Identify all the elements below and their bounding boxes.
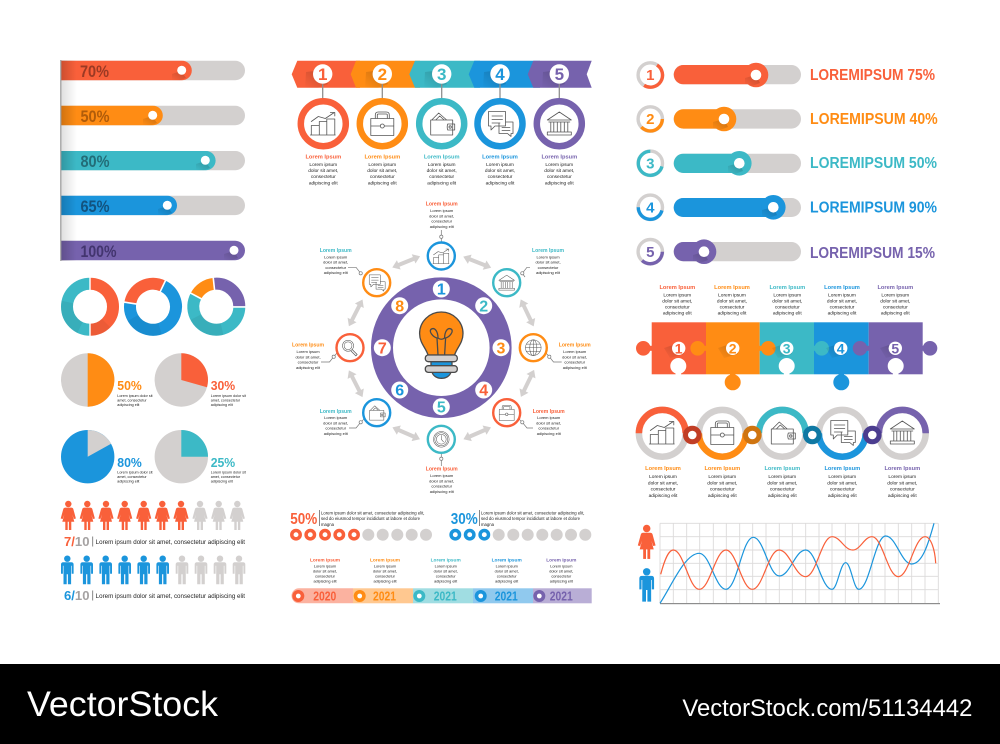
donut 2 <box>124 280 176 330</box>
step 4: dolor sit amet, <box>485 168 515 174</box>
bar 50% <box>61 106 245 126</box>
timeline text blocks: Lorem ipsum <box>496 565 518 569</box>
ring text: consectetur <box>830 487 855 493</box>
puzzle text: dolor sit amet, <box>880 298 910 304</box>
node 2: consectetur <box>538 265 559 270</box>
node 3: dolor sit amet, <box>562 354 587 359</box>
ring text <box>645 466 920 499</box>
puzzle text: Lorem Ipsum <box>659 285 695 291</box>
node 1: consectetur <box>431 219 453 224</box>
node 5 <box>426 426 458 494</box>
footer band <box>0 664 1000 744</box>
step 5: consectetur <box>547 174 572 180</box>
puzzle text: Lorem ipsum <box>718 292 746 298</box>
blue series <box>660 523 934 603</box>
step 5: adipiscing elit <box>545 180 574 186</box>
rings <box>639 410 926 457</box>
panel: 30% dot rating <box>451 510 591 541</box>
node 5: Lorem Ipsum <box>426 467 458 473</box>
ring text: Lorem Ipsum <box>704 466 740 472</box>
step 5: Lorem Ipsum <box>541 155 577 161</box>
panel: 50% dot rating <box>290 510 432 541</box>
node 2: dolor sit amet, <box>535 260 561 265</box>
step 2: adipiscing elit <box>368 180 397 186</box>
node 4 <box>493 399 565 436</box>
node 7: Lorem Ipsum <box>292 343 324 349</box>
step 4: Lorem ipsum <box>486 162 514 168</box>
pie 30%: amet, consectetur <box>211 399 241 403</box>
ring text: adipiscing elit <box>828 493 857 499</box>
puzzle text: adipiscing elit <box>881 311 910 317</box>
node 4: consectetur <box>538 426 560 431</box>
panel: linked rings <box>639 410 926 499</box>
ring text: Lorem Ipsum <box>884 466 920 472</box>
panel: radial diagram with lightbulb <box>292 202 591 494</box>
node 8: Lorem Ipsum <box>320 248 352 254</box>
timeline text blocks: consectetur <box>436 575 456 579</box>
pie 50% <box>61 353 153 407</box>
step 5: Lorem ipsum <box>545 162 573 168</box>
timeline text blocks: adipiscing elit <box>495 580 519 584</box>
node 5: Lorem ipsum <box>430 473 454 478</box>
ring numbers: 3 <box>497 340 506 357</box>
puzzle pieces <box>636 322 937 390</box>
node 7: adipiscing elit <box>296 365 321 370</box>
bar 50%: 50% <box>80 108 110 126</box>
step 2: consectetur <box>370 174 395 180</box>
ring text: adipiscing elit <box>649 493 678 499</box>
timeline text blocks: dolor sit amet, <box>313 570 337 574</box>
step 2: dolor sit amet, <box>367 168 397 174</box>
step 5 <box>537 64 582 186</box>
node 8: consectetur <box>325 265 347 270</box>
node 4: adipiscing elit <box>537 431 562 436</box>
puzzle text: Lorem ipsum <box>881 292 909 298</box>
step 3: 3 <box>437 65 446 84</box>
slider 2 <box>638 107 938 131</box>
step 4: adipiscing elit <box>486 180 515 186</box>
ring icons <box>649 420 914 446</box>
bar 70% <box>61 61 245 81</box>
ring text: consectetur <box>651 487 676 493</box>
node 1 <box>426 202 458 270</box>
node 4: Lorem Ipsum <box>533 409 565 415</box>
slider 5 <box>638 239 935 264</box>
description: sed do eiusmod tempor incididunt ut labore et dolore <box>321 516 421 521</box>
node 5: adipiscing elit <box>430 489 455 494</box>
pie 30%: Lorem ipsum dolor sit <box>211 394 246 398</box>
node 2: adipiscing elit <box>536 270 561 275</box>
heading 30%: 30% <box>451 511 478 528</box>
node 6: Lorem ipsum <box>324 415 348 420</box>
link circles <box>686 428 879 442</box>
slider 1: 1 <box>646 67 654 84</box>
pie 30% <box>155 353 246 407</box>
description: Lorem ipsum dolor sit amet, consectetur adipiscing elit, <box>321 510 424 515</box>
pie 50%: adipiscing elit <box>117 403 139 407</box>
timeline text blocks: consectetur <box>315 575 336 579</box>
ring text: dolor sit amet, <box>648 480 678 486</box>
timeline text blocks: Lorem Ipsum <box>370 557 400 563</box>
donut 3 <box>190 277 246 330</box>
puzzle text: dolor sit amet, <box>717 298 747 304</box>
bar 65% <box>61 196 245 216</box>
step 5: dolor sit amet, <box>544 168 574 174</box>
step 1: 1 <box>318 65 327 84</box>
puzzle numbers: 3 <box>783 340 791 356</box>
pie 50%: amet, consectetur <box>117 399 147 403</box>
puzzle text: Lorem Ipsum <box>769 285 805 291</box>
pie 25% <box>155 430 246 484</box>
slider 1: LOREMIPSUM 75% <box>810 67 935 84</box>
men row 6 of 10 <box>61 556 245 584</box>
men caption: Lorem ipsum dolor sit amet, consectetur adipiscing elit <box>96 594 245 600</box>
step 2: Lorem Ipsum <box>364 155 400 161</box>
timeline text blocks: adipiscing elit <box>434 580 458 584</box>
pie 80%: Lorem ipsum dolor sit <box>117 470 153 474</box>
dots <box>292 529 432 541</box>
step 4 <box>478 64 522 186</box>
ring text: adipiscing elit <box>708 493 737 499</box>
timeline bar: 2021 <box>434 589 457 604</box>
ring text: Lorem ipsum <box>888 474 916 480</box>
pie 50%: Lorem ipsum dolor sit <box>117 394 153 398</box>
ribbon arrows <box>292 61 592 88</box>
node 4: Lorem ipsum <box>537 415 561 420</box>
puzzle text: consectetur <box>883 304 908 310</box>
puzzle text: consectetur <box>720 304 745 310</box>
pie 80%: 80% <box>117 455 142 470</box>
step 3: Lorem Ipsum <box>424 155 460 161</box>
red series <box>661 537 936 589</box>
timeline text blocks: consectetur <box>375 575 396 579</box>
puzzle numbers: 4 <box>837 340 845 356</box>
ring text: adipiscing elit <box>888 493 917 499</box>
ring text: adipiscing elit <box>768 493 797 499</box>
puzzle text: consectetur <box>665 304 690 310</box>
step 2 <box>360 64 405 186</box>
women caption: Lorem ipsum dolor sit amet, consectetur adipiscing elit <box>96 540 245 546</box>
brand name: VectorStock <box>27 685 219 724</box>
bar 100% <box>61 241 245 261</box>
puzzle numbers <box>672 340 902 356</box>
slider 2: 2 <box>646 111 654 128</box>
chart axis <box>660 603 940 604</box>
step 3 <box>419 64 464 186</box>
panel: people pictograms <box>61 501 245 603</box>
step 3: Lorem ipsum <box>428 162 456 168</box>
node 3 <box>520 334 591 370</box>
bar 80% <box>61 151 245 171</box>
timeline text blocks: Lorem Ipsum <box>546 557 576 563</box>
node 2: Lorem Ipsum <box>532 248 564 254</box>
puzzle text: adipiscing elit <box>718 311 747 317</box>
slider 4 <box>638 195 937 220</box>
description: magna <box>321 522 335 527</box>
node 3: consectetur <box>564 360 586 365</box>
timeline text blocks: Lorem ipsum <box>314 565 336 569</box>
panel: progress sliders <box>638 63 938 264</box>
ring text: consectetur <box>710 487 735 493</box>
node 6: dolor sit amet, <box>323 420 348 425</box>
node 5: consectetur <box>431 484 453 489</box>
puzzle numbers: 2 <box>729 340 737 356</box>
panel: numbered ribbon steps <box>292 61 592 186</box>
ring text: dolor sit amet, <box>707 480 737 486</box>
bar 65%: 65% <box>80 198 110 216</box>
timeline text blocks: Lorem Ipsum <box>431 557 461 563</box>
step 5: 5 <box>555 65 564 84</box>
node 3: adipiscing elit <box>563 365 588 370</box>
timeline text blocks: dolor sit amet, <box>495 570 519 574</box>
ring text: Lorem ipsum <box>768 474 796 480</box>
connector leaders <box>321 230 562 466</box>
ring numbers: 2 <box>479 298 488 315</box>
node 1: adipiscing elit <box>430 224 455 229</box>
slider 4: LOREMIPSUM 90% <box>810 199 937 216</box>
node 6: adipiscing elit <box>324 431 349 436</box>
ring numbers: 4 <box>479 383 488 400</box>
step 2: Lorem ipsum <box>368 162 396 168</box>
puzzle text: Lorem Ipsum <box>714 285 750 291</box>
panel: pie charts <box>61 353 246 484</box>
node 7: dolor sit amet, <box>295 354 321 359</box>
icon: lightbulb <box>420 312 463 378</box>
node 3: Lorem Ipsum <box>559 343 591 349</box>
timeline text blocks: adipiscing elit <box>550 580 574 584</box>
ring text: dolor sit amet, <box>827 480 857 486</box>
puzzle text: dolor sit amet, <box>772 298 802 304</box>
node 7: consectetur <box>298 360 319 365</box>
slider 3 <box>638 151 937 176</box>
description: sed do eiusmod tempor incididunt ut labore et dolore <box>481 516 581 521</box>
timeline bar: 2020 <box>313 589 336 604</box>
puzzle text: Lorem ipsum <box>663 292 691 298</box>
image id: VectorStock.com/51134442 <box>682 695 972 722</box>
pie 80% <box>61 430 153 484</box>
ring numbers: 7 <box>378 340 387 357</box>
node 2: Lorem ipsum <box>536 254 560 259</box>
timeline bar: 2021 <box>495 589 518 604</box>
timeline bar: 2021 <box>373 589 396 604</box>
ring text: consectetur <box>890 487 915 493</box>
dots <box>451 529 591 541</box>
pie 80%: adipiscing elit <box>117 480 139 484</box>
timeline text blocks: dolor sit amet, <box>373 570 397 574</box>
pie 25%: adipiscing elit <box>211 480 233 484</box>
puzzle text: adipiscing elit <box>828 311 857 317</box>
purple ring <box>382 288 501 407</box>
ring text: Lorem ipsum <box>649 474 677 480</box>
ring text: Lorem ipsum <box>828 474 856 480</box>
ring text: consectetur <box>770 487 795 493</box>
description: magna <box>481 522 495 527</box>
step 1: Lorem ipsum <box>309 162 337 168</box>
bar 80%: 80% <box>80 153 110 171</box>
step 4: consectetur <box>488 174 513 180</box>
ring text: Lorem Ipsum <box>824 466 860 472</box>
puzzle numbers: 1 <box>675 340 683 356</box>
step 4: Lorem Ipsum <box>482 155 518 161</box>
puzzle text: Lorem Ipsum <box>824 285 860 291</box>
step 1: Lorem Ipsum <box>305 155 341 161</box>
ring text: dolor sit amet, <box>767 480 797 486</box>
timeline text blocks: Lorem ipsum <box>435 565 457 569</box>
ring text: Lorem Ipsum <box>764 466 800 472</box>
puzzle numbers: 5 <box>891 340 899 356</box>
puzzle text <box>659 285 913 317</box>
pie 25%: amet, consectetur <box>211 475 241 479</box>
bar 70%: 70% <box>80 63 109 81</box>
women caption: 7/10 <box>64 534 90 549</box>
node 3: Lorem ipsum <box>563 349 587 354</box>
slider 5: LOREMIPSUM 15% <box>810 245 935 262</box>
puzzle text: Lorem Ipsum <box>877 285 913 291</box>
ring numbers: 8 <box>395 298 404 315</box>
pie 30%: adipiscing elit <box>211 403 233 407</box>
timeline text blocks: Lorem ipsum <box>374 565 396 569</box>
step 1: consectetur <box>311 174 336 180</box>
slider 4: 4 <box>646 200 655 216</box>
node 8: adipiscing elit <box>324 270 349 275</box>
puzzle text: adipiscing elit <box>663 311 692 317</box>
slider 3: 3 <box>646 156 654 172</box>
timeline text blocks: Lorem ipsum <box>550 565 572 569</box>
node 4: dolor sit amet, <box>536 420 561 425</box>
slider 1 <box>638 63 935 87</box>
timeline text blocks: adipiscing elit <box>373 580 397 584</box>
timeline bar: 2021 <box>550 589 573 604</box>
timeline text blocks: consectetur <box>551 575 572 579</box>
description: Lorem ipsum dolor sit amet, consectetur adipiscing elit, <box>481 510 584 515</box>
timeline text blocks <box>310 557 576 584</box>
pie 25%: 25% <box>211 455 236 470</box>
slider 3: LOREMIPSUM 50% <box>810 155 937 172</box>
panel: year timeline <box>292 557 592 604</box>
step 2: 2 <box>378 65 387 84</box>
step 4: 4 <box>495 65 505 84</box>
node 7: Lorem ipsum <box>296 349 320 354</box>
step 1: adipiscing elit <box>309 180 338 186</box>
puzzle text: Lorem ipsum <box>828 292 856 298</box>
node 6: Lorem Ipsum <box>320 409 352 415</box>
pie 30%: 30% <box>211 378 236 393</box>
timeline text blocks: dolor sit amet, <box>434 570 458 574</box>
ring numbers: 5 <box>437 399 446 416</box>
puzzle text: Lorem ipsum <box>773 292 801 298</box>
node 5: dolor sit amet, <box>429 478 454 483</box>
puzzle text: adipiscing elit <box>773 311 802 317</box>
ring text: Lorem Ipsum <box>645 466 681 472</box>
panel: horizontal percentage bars <box>60 60 245 261</box>
donut 1 <box>67 276 113 337</box>
timeline text blocks: Lorem Ipsum <box>310 557 340 563</box>
node 2 <box>493 248 564 296</box>
slider 5: 5 <box>646 244 654 261</box>
puzzle text: consectetur <box>775 304 800 310</box>
connecting arrows <box>344 252 539 444</box>
women caption <box>64 534 245 549</box>
timeline text blocks: Lorem Ipsum <box>492 557 522 563</box>
timeline text blocks: adipiscing elit <box>313 580 337 584</box>
ring numbers <box>374 280 510 416</box>
panel: donut charts <box>67 276 246 337</box>
icon: woman <box>638 525 656 559</box>
puzzle text: consectetur <box>830 304 855 310</box>
timeline bar <box>292 588 592 604</box>
bar 100%: 100% <box>80 243 117 261</box>
node 8: dolor sit amet, <box>323 260 348 265</box>
men caption <box>64 588 245 603</box>
puzzle text: dolor sit amet, <box>827 298 857 304</box>
women row 7 of 10 <box>61 501 245 530</box>
chart grid <box>660 523 938 603</box>
pie 80%: amet, consectetur <box>117 475 147 479</box>
node 8 <box>320 248 390 296</box>
step 3: dolor sit amet, <box>427 168 457 174</box>
step 1: dolor sit amet, <box>308 168 338 174</box>
panel: puzzle <box>636 285 937 390</box>
pie 25%: Lorem ipsum dolor sit <box>211 470 246 474</box>
ring text: Lorem ipsum <box>708 474 736 480</box>
node 6: consectetur <box>325 426 347 431</box>
heading 50%: 50% <box>290 511 317 528</box>
ring numbers: 1 <box>437 282 446 299</box>
puzzle text: dolor sit amet, <box>662 298 692 304</box>
step 3: consectetur <box>429 174 454 180</box>
ring text: dolor sit amet, <box>887 480 917 486</box>
node 8: Lorem ipsum <box>324 254 348 259</box>
step 3: adipiscing elit <box>427 180 457 186</box>
node 1: Lorem Ipsum <box>426 202 458 208</box>
node 7 <box>292 334 364 370</box>
ring numbers: 6 <box>395 383 404 400</box>
timeline text blocks: consectetur <box>497 575 517 579</box>
timeline text blocks: dolor sit amet, <box>549 570 573 574</box>
node 1: Lorem ipsum <box>430 208 454 213</box>
icon: man <box>639 568 654 602</box>
stems <box>323 84 559 99</box>
step 1 <box>301 64 346 186</box>
men caption: 6/10 <box>64 588 90 603</box>
slider 2: LOREMIPSUM 40% <box>810 111 938 128</box>
panel: line chart <box>638 523 940 604</box>
node 1: dolor sit amet, <box>429 213 454 218</box>
pie 50%: 50% <box>117 378 142 393</box>
node 6 <box>320 399 390 436</box>
